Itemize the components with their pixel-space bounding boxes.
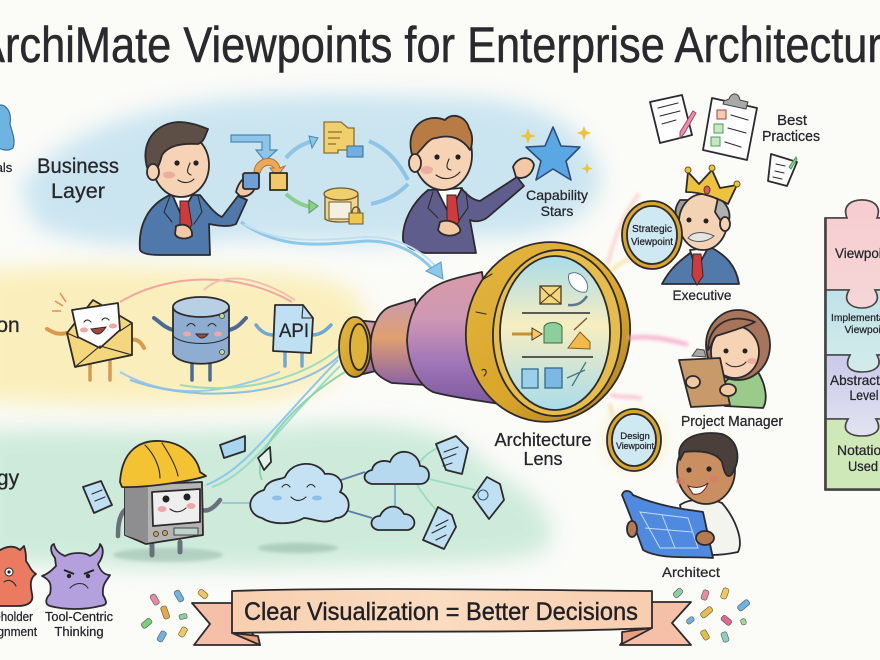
label: tool-centric thinking: Tool-Centric — [45, 609, 113, 624]
character: database — [154, 297, 246, 380]
label: executive: Executive — [672, 287, 732, 303]
businessman with capability star — [403, 116, 534, 253]
monster: stakeholder misalignment — [0, 546, 36, 606]
project manager — [679, 310, 770, 408]
label: project manager: Project Manager — [681, 413, 783, 430]
panel: business layer wash — [20, 95, 600, 246]
heading: business layer: Business — [37, 155, 119, 178]
puzzle: framework panel — [825, 200, 880, 490]
label: capability stars: Capability — [526, 187, 588, 203]
label: stakeholder misalignment — [0, 609, 37, 639]
flow arrow: business to lens — [241, 222, 443, 279]
confetti left — [140, 588, 209, 643]
architect with blueprint — [622, 433, 740, 558]
icon: cloud right top — [364, 452, 429, 484]
floating note — [258, 447, 271, 470]
banner: clear visualization: Clear Visualization = Better Decisions — [244, 598, 638, 626]
heading: layer: Layer — [51, 180, 105, 203]
icon: capability star — [520, 126, 592, 180]
magnifier: design viewpoint: Design — [620, 431, 650, 442]
panel: technology layer wash — [0, 423, 551, 568]
technology: network lines — [222, 445, 475, 520]
puzzle: framework panel: Used — [848, 458, 878, 474]
character: API document: API — [279, 321, 309, 342]
label: tool-centric thinking: Thinking — [54, 624, 104, 639]
label: best practices — [762, 112, 820, 145]
magnifier: design viewpoint — [601, 407, 667, 473]
label: capability stars: Stars — [541, 203, 573, 219]
label: architect: Architect — [662, 564, 720, 580]
banner: clear visualization — [192, 589, 691, 645]
character: API document — [256, 305, 331, 366]
floating documents right — [423, 436, 504, 549]
monster: tool-centric thinking — [42, 544, 110, 609]
character: smiling cloud — [250, 464, 349, 553]
label: best practices: Best — [777, 112, 808, 129]
floating document small left — [83, 481, 112, 513]
magnifier: strategic viewpoint — [622, 201, 682, 269]
technology: server with hard hat — [113, 441, 223, 562]
confetti right — [672, 587, 751, 643]
document icons: best practices — [650, 94, 797, 186]
businessman presenting — [140, 122, 256, 255]
label: capability stars — [526, 187, 588, 219]
floating envelope — [220, 436, 245, 458]
character: envelope — [47, 293, 144, 380]
label: architecture lens — [494, 430, 592, 469]
spyglass: architecture lens — [339, 231, 642, 433]
panel: application layer wash — [0, 267, 365, 406]
partial label: goals icon and text — [0, 105, 14, 175]
arcs between application items — [120, 279, 340, 394]
label: architecture lens: Lens — [523, 449, 563, 469]
executive with crown — [662, 165, 740, 285]
label: architecture lens: Architecture — [494, 430, 592, 450]
rays to viewpoints — [608, 195, 686, 428]
icon: cloud right bottom — [371, 507, 414, 530]
magnifier: design viewpoint: Viewpoint — [616, 441, 654, 452]
magnifier: strategic viewpoint: Strategic — [632, 224, 672, 235]
magnifier: strategic viewpoint: Viewpoint — [631, 237, 673, 248]
business process diagram — [231, 122, 408, 224]
label: tool-centric thinking — [45, 609, 113, 639]
label: best practices: Practices — [762, 128, 820, 145]
flow lines from technology to lens — [206, 360, 345, 487]
